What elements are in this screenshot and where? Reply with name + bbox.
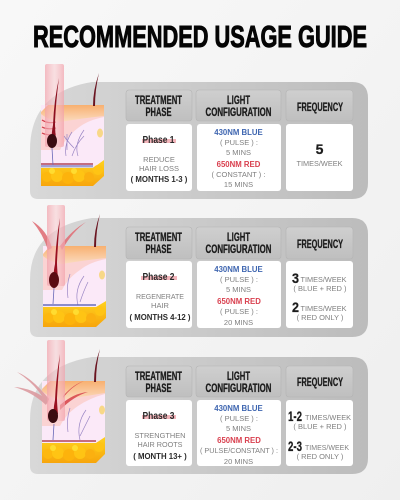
cell: phase 2 frequency: TIMES/WEEK	[300, 304, 346, 313]
cell: phase 2 treatment: HAIR	[151, 301, 170, 310]
cell: phase 1 treatment: Phase 1	[142, 135, 175, 146]
table: phase 1 headers: CONFIGURATION	[206, 107, 272, 119]
cell: phase 3 treatment	[126, 400, 192, 466]
cell: phase 2 light: ( PULSE ) :	[220, 307, 258, 316]
cell: phase 3 light: 5 MINS	[226, 424, 251, 433]
cell: phase 3 frequency: 2-3	[288, 438, 302, 454]
panel: phase 1	[30, 64, 368, 199]
illustration: skin cross-section phase 1	[41, 64, 104, 186]
cell: phase 1 light: 5 MINS	[226, 148, 251, 157]
cell: phase 3 frequency: TIMES/WEEK	[305, 443, 349, 452]
cell: phase 2 treatment	[126, 261, 192, 328]
cell: phase 2 light: 5 MINS	[226, 285, 251, 294]
cell: phase 1 light	[197, 124, 281, 191]
cell: phase 2 frequency: 2	[292, 299, 299, 315]
cell: phase 1 frequency: 5	[316, 141, 324, 157]
cell: phase 3 frequency: ( RED ONLY )	[297, 452, 344, 461]
cell: phase 1 treatment: ( MONTHS 1-3 )	[131, 175, 188, 184]
cell: phase 3 treatment: Phase 3	[142, 411, 175, 422]
table: phase 2 headers: PHASE	[146, 244, 172, 256]
cell: phase 2 treatment: Phase 2	[142, 272, 175, 283]
cell: phase 2 frequency: ( RED ONLY )	[297, 313, 344, 322]
cell: phase 3 light: ( PULSE/CONSTANT ) :	[200, 446, 278, 455]
table: phase 3 headers: CONFIGURATION	[206, 383, 272, 395]
cell: phase 3 treatment: HAIR ROOTS	[138, 440, 182, 449]
panel: phase 2	[30, 205, 368, 337]
table: phase 1 headers: FREQUENCY	[297, 102, 343, 114]
cell: phase 3 frequency: TIMES/WEEK	[305, 413, 351, 422]
table: phase 3 headers	[126, 366, 353, 397]
table: phase 2 headers: CONFIGURATION	[206, 244, 272, 256]
table: phase 3 headers: FREQUENCY	[297, 377, 343, 389]
panel: phase 3	[14, 340, 368, 474]
table: phase 1 headers: PHASE	[146, 107, 172, 119]
table: phase 3 headers: LIGHT	[227, 371, 250, 383]
cell: phase 3 frequency	[286, 400, 353, 466]
cell: phase 3 treatment: STRENGTHEN	[134, 431, 186, 440]
table: phase 2 headers: FREQUENCY	[297, 239, 343, 251]
cell: phase 1 frequency: TIMES/WEEK	[296, 159, 342, 168]
table: phase 1 headers	[126, 90, 353, 121]
cell: phase 3 treatment: ( MONTH 13+ )	[133, 452, 187, 461]
cell: phase 2 frequency: ( BLUE + RED )	[293, 284, 347, 293]
cell: phase 3 light: 430NM BLUE	[214, 404, 263, 413]
cell: phase 2 treatment: ( MONTHS 4-12 )	[129, 313, 191, 322]
cell: phase 2 light	[197, 261, 281, 328]
cell: phase 2 frequency: 3	[292, 270, 299, 286]
cell: phase 1 treatment	[126, 124, 192, 191]
cell: phase 1 light: 650NM RED	[217, 160, 261, 169]
cell: phase 1 light: 15 MINS	[224, 180, 253, 189]
cell: phase 1 light: 430NM BLUE	[214, 128, 263, 137]
cell: phase 2 light: 650NM RED	[217, 297, 261, 306]
cell: phase 1 light: ( PULSE ) :	[220, 138, 258, 147]
table: phase 2 headers: TREATMENT	[135, 232, 182, 244]
illustration: skin cross-section phase 3	[14, 340, 105, 463]
cell: phase 1 treatment: REDUCE	[143, 155, 175, 164]
cell: phase 2 treatment: REGENERATE	[136, 292, 184, 301]
cell: phase 1 frequency	[286, 124, 353, 191]
cell: phase 3 light: 650NM RED	[217, 436, 261, 445]
cell: phase 1 light: ( CONSTANT ) :	[212, 170, 265, 179]
cell: phase 2 frequency: TIMES/WEEK	[300, 275, 346, 284]
illustration: skin cross-section phase 2	[32, 205, 106, 327]
cell: phase 2 frequency	[286, 261, 353, 328]
table: phase 1 headers: LIGHT	[227, 95, 250, 107]
cell: phase 1 treatment: HAIR LOSS	[139, 164, 179, 173]
table: phase 3 headers: PHASE	[146, 383, 172, 395]
cell: phase 3 light	[197, 400, 281, 466]
cell: phase 3 frequency: ( BLUE + RED )	[293, 422, 347, 431]
table: phase 2 headers: LIGHT	[227, 232, 250, 244]
cell: phase 3 light: ( PULSE ) :	[220, 414, 258, 423]
cell: phase 2 light: 20 MINS	[224, 318, 253, 327]
table: phase 2 headers	[126, 227, 353, 259]
cell: phase 3 frequency: 1-2	[288, 408, 302, 424]
table: phase 1 headers: TREATMENT	[135, 95, 182, 107]
cell: phase 2 light: ( PULSE ) :	[220, 275, 258, 284]
cell: phase 3 light: 20 MINS	[224, 457, 253, 466]
table: phase 3 headers: TREATMENT	[135, 371, 182, 383]
cell: phase 2 light: 430NM BLUE	[214, 265, 263, 274]
